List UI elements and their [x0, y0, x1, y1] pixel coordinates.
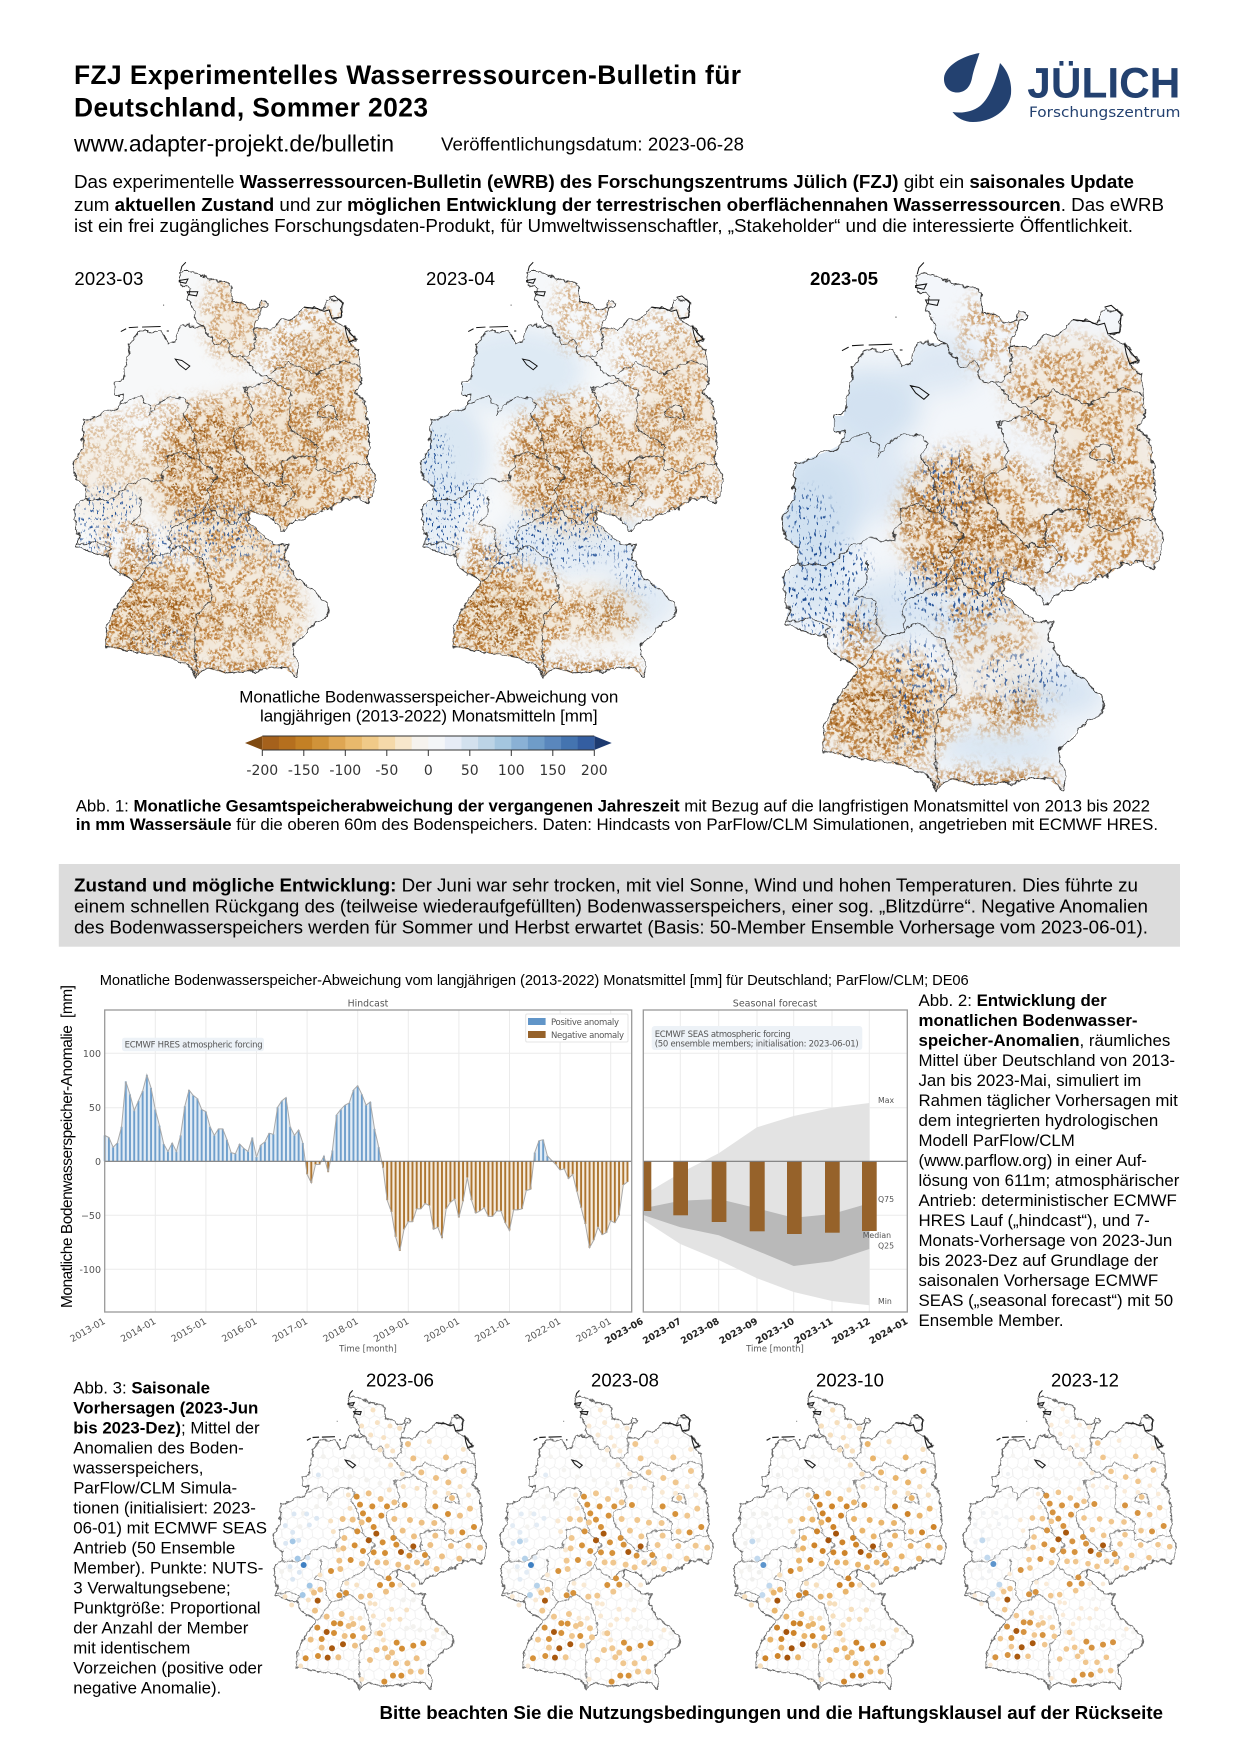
- footer note: Bitte beachten Sie die Nutzungsbedingungen und die Haftungsklausel auf der Rückseite: [380, 1702, 1163, 1723]
- colorbar tick labels: -100: [329, 763, 361, 779]
- map: 2023-04 soil water anomaly: [420, 262, 724, 679]
- figure 3 caption: [72, 1378, 267, 1698]
- forecast dots: [741, 1410, 940, 1682]
- hindcast title: Hindcast: [348, 999, 389, 1010]
- figure 2 caption: lösung von 611m; atmosphärischer: [918, 1171, 1180, 1190]
- figure 2 caption: Monats-Vorhersage von 2023-Jun: [918, 1231, 1172, 1250]
- figure 1 caption: Abb. 1: Monatliche Gesamtspeicherabweichung der vergangenen Jahreszeit mit Bezug auf die langfristigen Monatsmittel von 2013 bis 2022: [76, 797, 1150, 816]
- forecast map 2023-10: [733, 1370, 946, 1690]
- map label 2023-05: 2023-05: [810, 268, 878, 289]
- figure 3 caption: Abb. 3: Saisonale: [73, 1378, 210, 1398]
- map outline: [733, 1390, 946, 1690]
- forecast x axis labels: [603, 1316, 910, 1347]
- chart title: Monatliche Bodenwasserspeicher-Abweichung vom langjährigen (2013-2022) Monatsmittel [mm] für Deutschland; ParFlow/CLM; DE06: [100, 973, 969, 989]
- figure 2 caption: HRES Lauf („hindcast“), und 7-: [918, 1211, 1150, 1230]
- forecast x axis labels: 2024-01: [868, 1316, 910, 1347]
- map: 2023-05 soil water anomaly: [781, 262, 1164, 792]
- HRES forcing note: ECMWF HRES atmospheric forcing: [125, 1040, 263, 1050]
- forecast title: Seasonal forecast: [733, 999, 817, 1010]
- chart: seasonal forecast: [603, 999, 910, 1355]
- y axis labels: [79, 1049, 101, 1276]
- forecast bars: [643, 1161, 877, 1234]
- figure 3 caption: negative Anomalie).: [73, 1678, 221, 1698]
- quantile labels: Max: [878, 1096, 895, 1105]
- website url: www.adapter-projekt.de/bulletin: [73, 130, 394, 156]
- logo subline: Forschungszentrum: [1029, 105, 1180, 121]
- quantile labels: Min: [878, 1297, 892, 1306]
- quantile labels: [863, 1096, 895, 1306]
- figure 3 caption: 3 Verwaltungsebene;: [73, 1578, 231, 1598]
- figure 2 caption: Rahmen täglicher Vorhersagen mit: [918, 1091, 1178, 1110]
- intro paragraph: [74, 171, 1164, 236]
- x axis title: Time [month]: [338, 1345, 397, 1355]
- x axis labels: 2021-01: [473, 1316, 512, 1345]
- y axis labels: 50: [89, 1103, 101, 1114]
- chart: hindcast: [68, 999, 632, 1355]
- figure 3 caption: Vorzeichen (positive oder: [73, 1658, 263, 1678]
- figure 2 caption: [918, 991, 1180, 1330]
- map label 2023-03: 2023-03: [74, 268, 143, 289]
- colorbar legend: [245, 736, 612, 779]
- figure 3 caption: tionen (initialisiert: 2023-: [73, 1498, 256, 1518]
- figure 2 caption: Ensemble Member.: [918, 1311, 1064, 1330]
- forecast map 2023-12: [963, 1370, 1176, 1690]
- figure 2 caption: dem integrierten hydrologischen: [918, 1111, 1158, 1130]
- anomaly bars: [105, 1075, 627, 1251]
- right arrow: [594, 736, 612, 750]
- figure 3 caption: Antrieb (50 Ensemble: [73, 1538, 235, 1558]
- x axis labels: [68, 1316, 614, 1345]
- figure 3 caption: wasserspeichers,: [72, 1458, 203, 1478]
- legend: [526, 1014, 628, 1042]
- panel: status and outlook: [59, 864, 1180, 947]
- figure 2 caption: bis 2023-Dez auf Grundlage der: [918, 1251, 1159, 1270]
- figure 3 caption: ParFlow/CLM Simula-: [73, 1478, 237, 1498]
- figure 3 caption: Member). Punkte: NUTS-: [73, 1558, 263, 1578]
- map label 2023-04: 2023-04: [426, 268, 495, 289]
- forecast x axis labels: 2023-09: [718, 1316, 760, 1347]
- colorbar title: langjährigen (2013-2022) Monatsmitteln [mm]: [260, 707, 598, 726]
- title: [74, 60, 741, 122]
- min-max range band: [643, 1103, 869, 1305]
- figure 2 caption: monatlichen Bodenwasser-: [918, 1011, 1138, 1030]
- intro paragraph: ist ein frei zugängliches Forschungsdaten-Produkt, für Umweltwissenschaftler, „Stakeholder“ und die interessierte Öffentlichkeit.: [74, 215, 1133, 236]
- title: FZJ Experimentelles Wasserressourcen-Bulletin für: [74, 60, 741, 90]
- forecast x axis labels: 2023-10: [754, 1316, 797, 1347]
- map: 2023-03 soil water anomaly: [72, 262, 376, 679]
- forecast dots: [282, 1410, 480, 1682]
- colorbar title: Monatliche Bodenwasserspeicher-Abweichung von: [239, 688, 618, 707]
- figure 3 caption: 06-01) mit ECMWF SEAS: [73, 1518, 267, 1538]
- figure 2 caption: speicher-Anomalien, räumliches: [918, 1031, 1170, 1050]
- quantile labels: Q25: [878, 1242, 894, 1250]
- figure 2 caption: Modell ParFlow/CLM: [918, 1131, 1075, 1150]
- figure 1 caption: [76, 797, 1158, 834]
- x axis labels: 2022-01: [524, 1316, 563, 1345]
- forecast map 2023-06: [273, 1370, 486, 1690]
- x axis labels: 2017-01: [271, 1316, 310, 1345]
- intro paragraph: Das experimentelle Wasserressourcen-Bulletin (eWRB) des Forschungszentrums Jülich (FZJ) gibt ein saisonales Update: [74, 171, 1134, 192]
- icon: crescent: [952, 63, 1011, 122]
- SEAS forcing note: ECMWF SEAS atmospheric forcing: [655, 1030, 791, 1040]
- x axis labels: 2019-01: [372, 1316, 411, 1345]
- y axis labels: 0: [95, 1157, 101, 1168]
- x axis labels: 2023-01: [574, 1316, 614, 1345]
- title: Deutschland, Sommer 2023: [74, 92, 428, 122]
- figure 2 caption: Mittel über Deutschland von 2013-: [918, 1051, 1175, 1070]
- figure 2 caption: Abb. 2: Entwicklung der: [918, 991, 1107, 1010]
- map outline: [963, 1390, 1176, 1690]
- logo wordmark: JÜLICH: [1027, 59, 1180, 107]
- icon: drop: [944, 53, 980, 93]
- figure 3 caption: mit identischem: [73, 1638, 190, 1658]
- figure 3 caption: Vorhersagen (2023-Jun: [73, 1398, 258, 1418]
- figure 3 caption: Punktgröße: Proportional: [73, 1598, 261, 1618]
- legend: Positive anomaly: [551, 1018, 619, 1028]
- figure 3 caption: der Anzahl der Member: [73, 1618, 249, 1638]
- y axis labels: 100: [83, 1049, 101, 1060]
- panel: status and outlook: des Bodenwasserspeichers werden für Sommer und Herbst erwartet (Basis: 50-Member Ensemble Vorhersage vom 2023-06-01).: [74, 916, 1148, 937]
- SEAS forcing note: [652, 1026, 862, 1050]
- panel: status and outlook: Zustand und mögliche Entwicklung: Der Juni war sehr trocken, mit viel Sonne, Wind und hohen Temperaturen. Dies führte zu: [74, 875, 1138, 896]
- figure 2 caption: Antrieb: deterministischer ECMWF: [918, 1191, 1177, 1210]
- forecast dots: [509, 1410, 707, 1682]
- forecast x axis labels: 2023-11: [793, 1316, 835, 1347]
- colorbar tick labels: 100: [498, 763, 525, 779]
- forecast x axis title: Time [month]: [745, 1345, 804, 1355]
- forecast x axis labels: 2023-06: [603, 1316, 646, 1347]
- quantile labels: Q75: [878, 1195, 894, 1204]
- legend: Negative anomaly: [551, 1031, 624, 1041]
- forecast dots: [971, 1409, 1170, 1681]
- y axis labels: -100: [79, 1265, 101, 1276]
- colorbar tick labels: 50: [461, 763, 479, 779]
- x axis labels: 2014-01: [119, 1316, 158, 1345]
- figure 3 caption: bis 2023-Dez); Mittel der: [73, 1418, 260, 1438]
- colorbar tick labels: -200: [246, 763, 278, 779]
- publication date: Veröffentlichungsdatum: 2023-06-28: [441, 134, 744, 154]
- x axis labels: 2018-01: [321, 1316, 361, 1345]
- map label: 2023-12: [1051, 1370, 1119, 1391]
- forecast map 2023-08: [500, 1370, 713, 1690]
- colorbar tick labels: 0: [424, 763, 433, 779]
- interquartile band: [643, 1199, 869, 1266]
- figure 2 caption: SEAS („seasonal forecast“) mit 50: [918, 1291, 1173, 1310]
- colorbar tick labels: -50: [375, 763, 398, 779]
- chart y axis label: Monatliche Bodenwasserspeicher-Anomalie [mm]: [59, 985, 76, 1308]
- figure 3 caption: Anomalien des Boden-: [73, 1438, 244, 1458]
- figure 1 caption: in mm Wassersäule für die oberen 60m des Bodenspeichers. Daten: Hindcasts von ParFlow/CLM Simulationen, angetrieben mit ECMWF HRES.: [76, 815, 1158, 834]
- figure 2 caption: Jan bis 2023-Mai, simuliert im: [918, 1071, 1141, 1090]
- map outline: [500, 1390, 713, 1690]
- color segments: [262, 736, 594, 750]
- x axis labels: 2013-01: [68, 1316, 108, 1345]
- figure 2 caption: (www.parflow.org) in einer Auf-: [918, 1151, 1147, 1170]
- colorbar title: [239, 688, 618, 726]
- logo: Forschungszentrum Jülich: [944, 53, 1180, 122]
- x axis labels: 2016-01: [220, 1316, 259, 1345]
- intro paragraph: zum aktuellen Zustand und zur möglichen Entwicklung der terrestrischen oberflächennahen Wasserressourcen. Das eWRB: [74, 194, 1164, 215]
- SEAS forcing note: (50 ensemble members; initialisation: 2023-06-01): [655, 1040, 859, 1050]
- colorbar tick labels: 200: [581, 763, 608, 779]
- map label: 2023-10: [816, 1370, 884, 1391]
- panel: status and outlook: einem schnellen Rückgang des (teilweise wiederaufgefüllten) Bodenwasserspeichers, einer sog. „Blitzdürre“. Negative Anomalien: [74, 895, 1148, 916]
- left arrow: [245, 736, 262, 750]
- forecast x axis labels: 2023-07: [641, 1316, 684, 1347]
- forecast x axis labels: 2023-12: [830, 1316, 872, 1347]
- colorbar tick labels: 150: [539, 763, 566, 779]
- map outline: [273, 1390, 486, 1690]
- quantile labels: Median: [863, 1231, 891, 1240]
- colorbar tick labels: -150: [288, 763, 320, 779]
- x axis labels: 2020-01: [423, 1316, 462, 1345]
- map label: 2023-08: [591, 1370, 659, 1391]
- figure 2 caption: saisonalen Vorhersage ECMWF: [918, 1271, 1158, 1290]
- map label: 2023-06: [366, 1370, 434, 1391]
- colorbar tick labels: [246, 763, 608, 779]
- x axis labels: 2015-01: [170, 1316, 209, 1345]
- y axis labels: −50: [81, 1211, 101, 1222]
- forecast x axis labels: 2023-08: [679, 1316, 722, 1347]
